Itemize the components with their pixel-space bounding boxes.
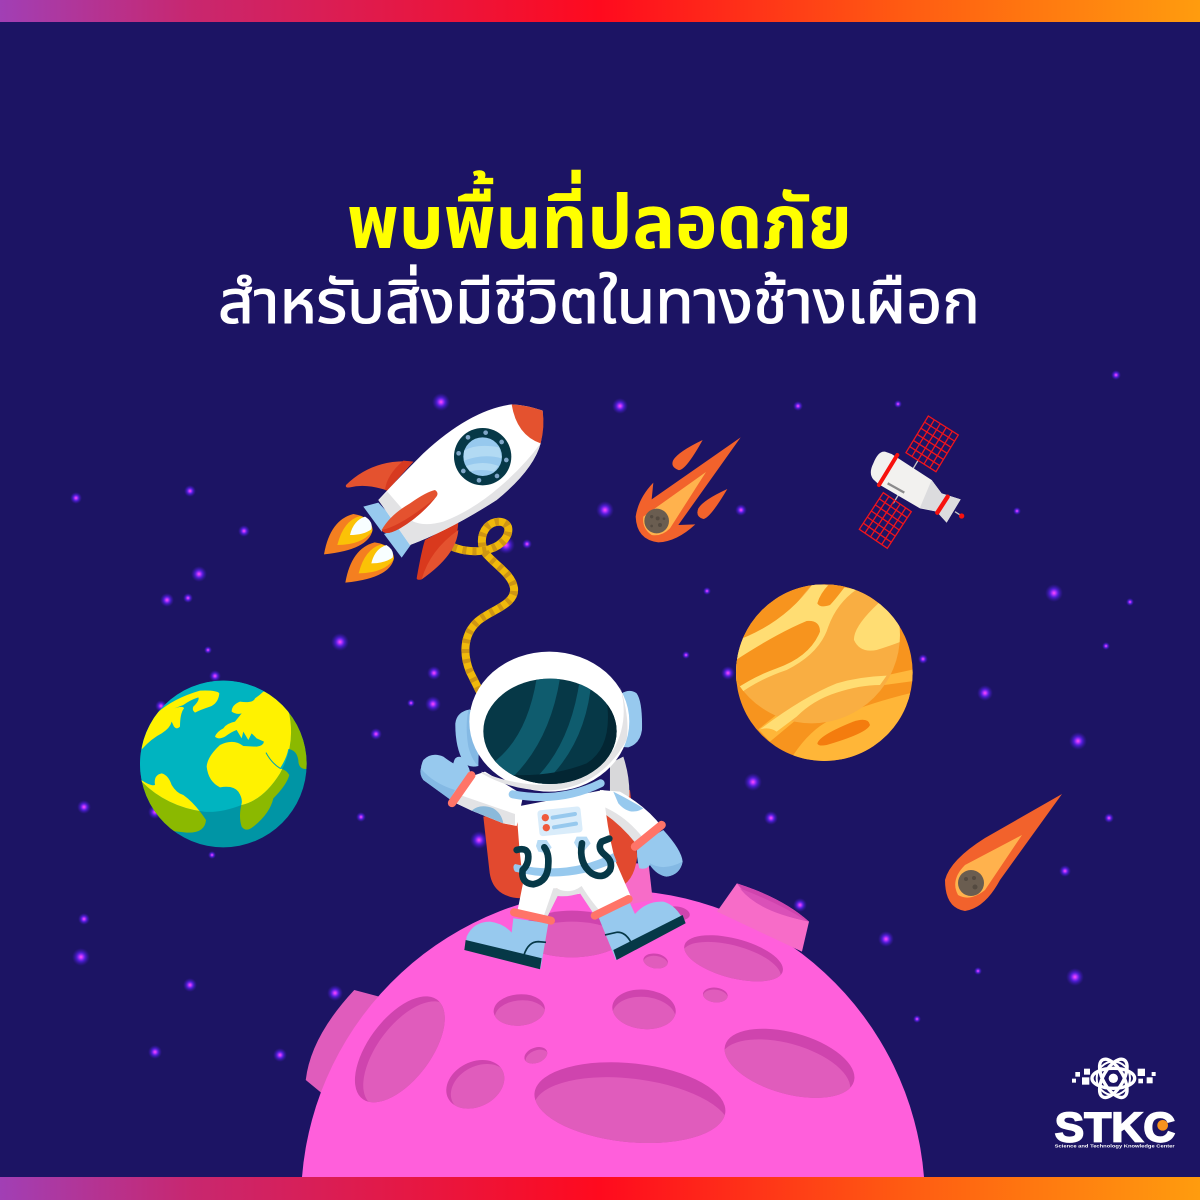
astronaut boot left [464,912,551,969]
meteor debris [672,440,727,519]
astronaut chest panel [537,806,583,837]
satellite arms [893,460,962,516]
tether rope [453,522,514,692]
rocket nose [512,404,543,443]
rocket centre fin [382,490,437,533]
rocket body [378,404,543,545]
logo wordmark: STKC [1055,1103,1175,1150]
rocket [324,404,543,583]
title line 2: สำหรับสิ่งมีชีวิตในทางช้างเผือก [218,265,980,336]
meteor with debris [636,437,741,542]
top gradient bar [0,0,1200,22]
earth land lit [142,690,292,811]
astronaut backpack top [610,757,629,800]
logo side squares [1072,1069,1156,1085]
astronaut right mitten [635,825,683,877]
rocket nozzles [363,503,411,558]
astronaut belt [513,853,617,876]
STKC logo [1055,1055,1175,1150]
planet jupiter [736,584,913,761]
earth globe [140,680,307,848]
earth land shaded [142,692,307,833]
meteor rock [644,509,669,533]
title [218,170,980,336]
satellite solar panel top [906,416,958,472]
astronaut left mitten [420,755,471,803]
stars background [70,370,1134,1062]
title line 1: พบพื้นที่ปลอดภัย [347,170,852,264]
satellite rear shade [920,480,961,523]
logo orange dot [1157,1120,1168,1131]
moon rim behind astronaut [617,863,653,907]
satellite [859,416,964,548]
astronaut ear left [455,709,478,767]
astronaut suit hoses [517,837,611,884]
satellite bands [879,455,948,513]
logo tagline: Science and Technology Knowledge Center [1055,1144,1175,1149]
moon rim left [306,990,385,1103]
satellite antenna tip [959,513,964,519]
moon rim right [717,883,809,952]
astronaut collar [513,783,601,797]
satellite body [871,452,961,523]
moon surface [302,890,924,1177]
rocket body shade [378,443,541,545]
astronaut backpack [483,790,637,898]
astronaut ear right [617,691,642,747]
astronaut visor [483,678,617,784]
astronaut boot right [595,899,686,960]
satellite solar panel bottom [859,493,911,548]
astronaut helmet [469,652,629,792]
astronaut legs and torso [517,790,632,918]
moon craters [337,904,867,1171]
astronaut right arm [600,790,662,847]
moon details [337,863,867,1171]
astronaut [420,652,686,969]
bottom gradient bar [0,1177,1200,1200]
rocket fins [346,461,458,580]
comet lower right [945,794,1062,911]
rocket window [454,428,511,485]
logo atom mark [1092,1055,1135,1102]
comet rock [958,870,984,896]
rocket flames [324,514,394,583]
astronaut left arm [453,772,523,826]
